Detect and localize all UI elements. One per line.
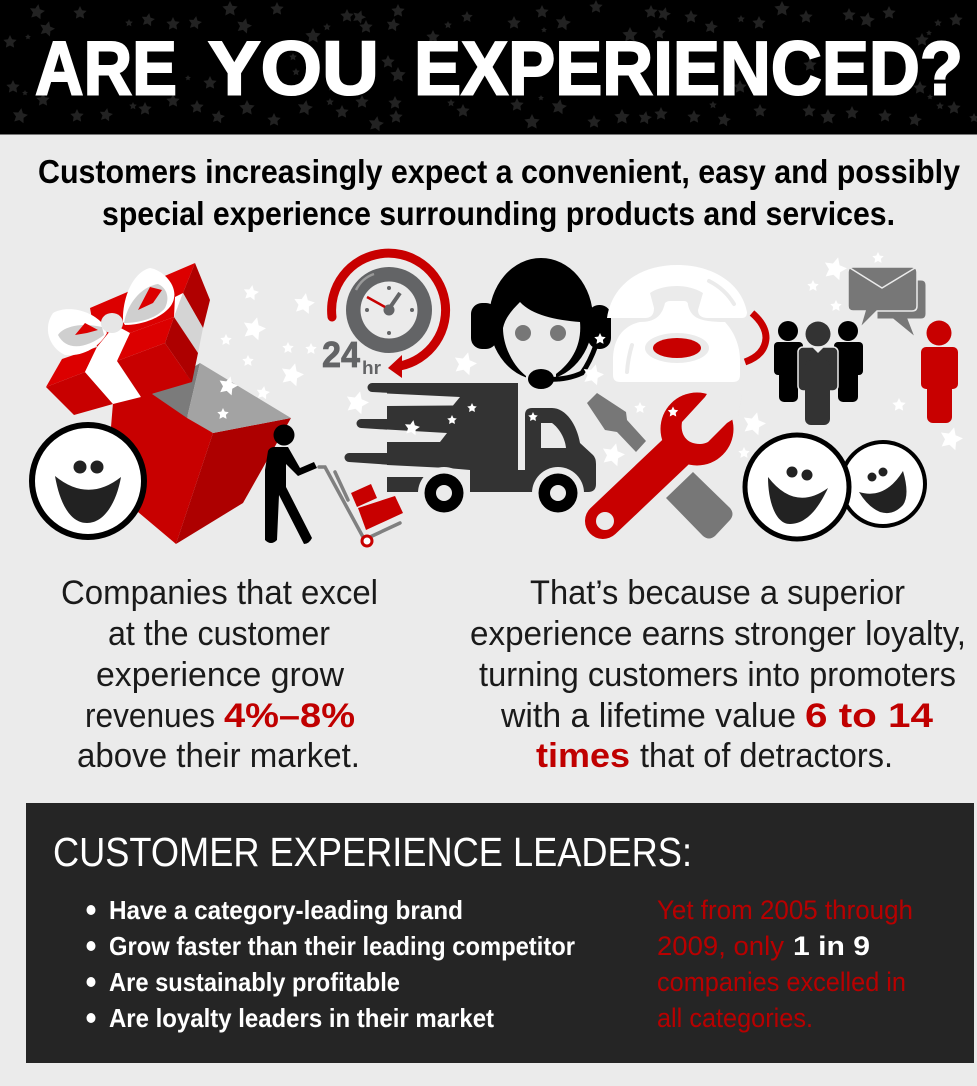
text block: right statistic: turning customers into promoters — [479, 656, 956, 694]
text block: right statistic: That’s because a superior — [530, 574, 905, 612]
bullet list: Are loyalty leaders in their market — [109, 1003, 494, 1033]
icon: white telephone — [607, 265, 766, 382]
icon: open gift box — [46, 263, 291, 544]
bullet list — [86, 895, 575, 1033]
title: ARE — [35, 26, 177, 112]
icon: 24 hour clock: hr — [362, 358, 381, 378]
bullet list: Grow faster than their leading competitor — [109, 931, 575, 961]
text block: right statistic: that of detractors. — [640, 737, 893, 775]
red callout text: 2009, only — [657, 931, 784, 961]
text block: left statistic: experience grow — [96, 656, 344, 694]
red callout text: 1 in 9 — [793, 931, 870, 961]
text block: left statistic: above their market. — [77, 737, 360, 775]
icon: delivery truck — [344, 383, 596, 523]
red callout text — [657, 895, 913, 1033]
icon: left smiley — [32, 425, 144, 537]
icon: red person — [921, 320, 958, 423]
text block: left statistic: revenues — [85, 697, 215, 735]
icon: call-centre agent — [471, 258, 611, 389]
icon: speech bubbles — [848, 267, 926, 337]
text block: right statistic: times — [536, 737, 630, 775]
icon: group of people — [774, 321, 863, 425]
text block: right statistic: 6 to 14 — [805, 697, 933, 735]
text block: left statistic: at the customer — [108, 615, 330, 653]
subtitle — [38, 153, 961, 232]
icon: 24 hour clock: 24 — [322, 334, 360, 375]
red callout text: all categories. — [657, 1003, 813, 1033]
text block: left statistic: Companies that excel — [61, 574, 378, 612]
text block: right statistic — [470, 574, 966, 775]
icon: red wrench — [596, 386, 742, 530]
panel: customer experience leaders — [26, 803, 974, 1063]
icon: person with trolley — [265, 424, 403, 546]
icon: 24 hour clock — [322, 253, 446, 378]
illustration: sparkling stars — [220, 252, 965, 467]
bullet list: Have a category-leading brand — [109, 895, 463, 925]
icon: two right smileys — [745, 435, 925, 539]
text block: right statistic: with a lifetime value — [500, 697, 796, 735]
title: YOU — [208, 26, 379, 112]
icon: screwdriver and hammer — [587, 393, 732, 538]
bullet list: Are sustainably profitable — [109, 967, 400, 997]
panel heading: CUSTOMER EXPERIENCE LEADERS: — [53, 829, 692, 875]
header banner — [0, 0, 977, 134]
subtitle: special experience surrounding products and services. — [102, 195, 895, 232]
text block: left statistic — [61, 574, 378, 775]
red callout text: companies excelled in — [657, 967, 906, 997]
title — [35, 26, 963, 112]
red callout text: Yet from 2005 through — [657, 895, 913, 925]
text block: left statistic: 4%–8% — [224, 697, 355, 735]
text block: right statistic: experience earns stronger loyalty, — [470, 615, 966, 653]
